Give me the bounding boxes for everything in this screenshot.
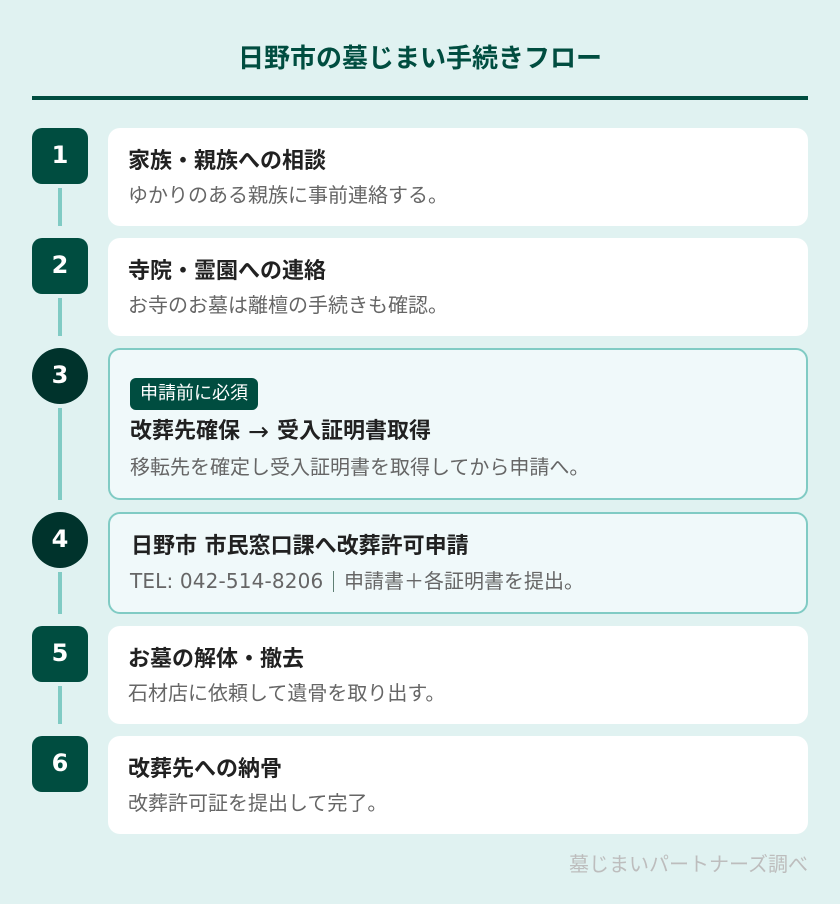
step 2 badge: 2 bbox=[52, 251, 68, 279]
title: 日野市の墓じまい手続きフロー bbox=[238, 44, 602, 74]
step 6 badge bbox=[32, 736, 88, 792]
step 5 badge bbox=[32, 626, 88, 682]
step 3 description: 移転先を確定し受入証明書を取得してから申請へ。 bbox=[130, 455, 589, 479]
panel: step 4 highlighted bbox=[108, 512, 808, 614]
panel: step 5 bbox=[108, 626, 808, 724]
step 6 description: 改葬許可証を提出して完了。 bbox=[128, 791, 387, 815]
step 3 heading: → bbox=[248, 417, 269, 446]
title rule bbox=[32, 96, 808, 100]
step 6 badge: 6 bbox=[52, 749, 68, 777]
step 4 description bbox=[130, 569, 584, 593]
required tag: 申請前に必須 bbox=[140, 383, 248, 404]
step 1 connector bbox=[58, 188, 62, 226]
step 3 badge bbox=[32, 348, 88, 404]
step 2 connector bbox=[58, 298, 62, 336]
step 4 separator bbox=[333, 571, 334, 592]
step 4 heading: 日野市 市民窓口課へ改葬許可申請 bbox=[131, 534, 469, 559]
step 1 badge bbox=[32, 128, 88, 184]
step 1 badge: 1 bbox=[52, 141, 68, 169]
step 5 connector bbox=[58, 686, 62, 724]
step 3 badge: 3 bbox=[52, 361, 68, 389]
step 5 heading: お墓の解体・撤去 bbox=[128, 647, 304, 672]
step 4 connector bbox=[58, 572, 62, 614]
step 1 description: ゆかりのある親族に事前連絡する。 bbox=[128, 183, 448, 207]
panel: step 6 bbox=[108, 736, 808, 834]
step 5 description: 石材店に依頼して遺骨を取り出す。 bbox=[128, 681, 445, 705]
step 2 description: お寺のお墓は離檀の手続きも確認。 bbox=[128, 293, 448, 317]
panel: step 2 bbox=[108, 238, 808, 336]
step 4 badge: 4 bbox=[52, 525, 68, 553]
step 4 description: 申請書＋各証明書を提出。 bbox=[344, 569, 584, 593]
source note: 墓じまいパートナーズ調べ bbox=[569, 852, 808, 876]
step 2 badge bbox=[32, 238, 88, 294]
step 4 description: TEL: 042-514-8206 bbox=[130, 569, 323, 593]
step 5 badge: 5 bbox=[52, 639, 68, 667]
required tag bbox=[130, 378, 258, 410]
step 1 heading: 家族・親族への相談 bbox=[128, 149, 326, 174]
step 4 badge bbox=[32, 512, 88, 568]
panel: step 3 highlighted bbox=[108, 348, 808, 500]
panel: step 1 bbox=[108, 128, 808, 226]
step 3 connector bbox=[58, 408, 62, 500]
step 3 heading: 改葬先確保 受入証明書取得 bbox=[130, 419, 431, 444]
step 2 heading: 寺院・霊園への連絡 bbox=[128, 259, 326, 284]
step 6 heading: 改葬先への納骨 bbox=[128, 757, 282, 782]
